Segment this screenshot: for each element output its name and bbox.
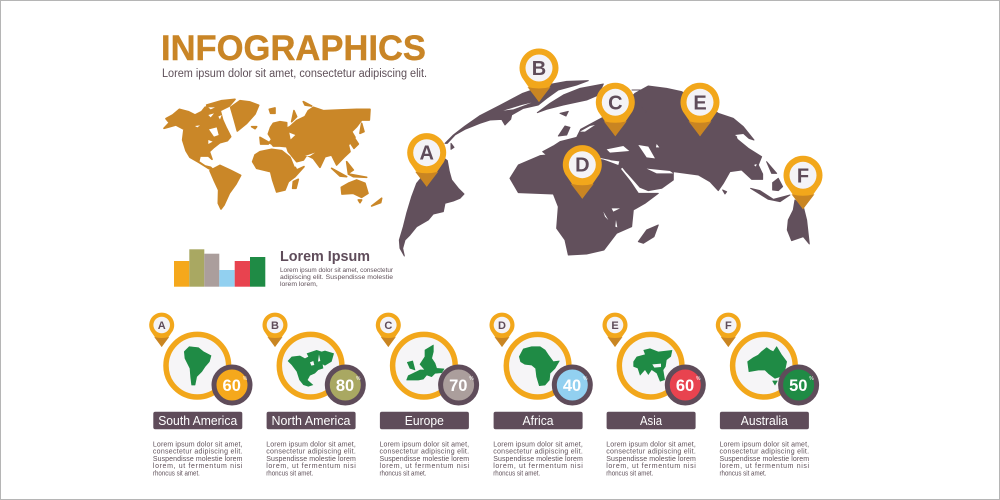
flat world map — [164, 99, 382, 209]
card: North America — [262, 313, 363, 477]
small pin C — [376, 313, 401, 347]
badge 80 — [327, 367, 363, 403]
badge 70 — [441, 367, 477, 403]
Australia — [787, 200, 809, 244]
description: Lorem ipsum dolor sit amet, — [153, 442, 243, 448]
pin B: B — [532, 58, 546, 80]
pin A: A — [419, 143, 434, 165]
card: Australia — [716, 313, 817, 477]
small pin E — [602, 313, 628, 347]
badge 80: % — [356, 376, 361, 382]
description: Lorem ipsum dolor sit amet, — [266, 442, 356, 448]
description: Suspendisse molestie lorem — [719, 456, 809, 463]
label: South America — [158, 413, 238, 428]
description: rhoncus sit amet. — [719, 470, 767, 477]
pin A — [407, 133, 446, 187]
card: Africa — [490, 313, 590, 477]
description: consectetur adipiscing elit. — [606, 449, 696, 456]
small pin D: D — [498, 320, 506, 332]
white cut-outs — [503, 103, 757, 227]
ring — [166, 334, 229, 397]
description — [380, 442, 470, 477]
map: Europe — [407, 345, 444, 380]
small pin B: B — [271, 320, 279, 332]
description: lorem, ut fermentum nisi — [266, 463, 356, 470]
description: lorem, ut fermentum nisi — [153, 463, 243, 470]
description: Suspendisse molestie lorem — [606, 456, 696, 463]
description — [153, 442, 243, 477]
badge 40: % — [583, 376, 588, 382]
description: Suspendisse molestie lorem — [493, 456, 583, 463]
ring — [733, 334, 795, 397]
description — [720, 442, 810, 477]
chart description: Lorem ipsum dolor sit amet, consectetur — [280, 267, 394, 274]
description: lorem, ut fermentum nisi — [493, 463, 583, 470]
curved world map — [399, 81, 809, 256]
ring — [506, 334, 569, 397]
ring — [279, 334, 342, 397]
chart heading: Lorem Ipsum — [280, 249, 370, 265]
card: South America — [149, 313, 250, 477]
bar chart — [174, 249, 265, 287]
badge 80: 80 — [336, 377, 354, 395]
label: Europe — [405, 413, 444, 428]
description: consectetur adipiscing elit. — [379, 449, 469, 456]
label: North America — [272, 413, 351, 428]
description: rhoncus sit amet. — [493, 470, 540, 477]
label: Asia — [640, 413, 663, 428]
description: Lorem ipsum dolor sit amet, — [379, 442, 469, 448]
South America — [399, 155, 464, 256]
description: Lorem ipsum dolor sit amet, — [606, 442, 696, 448]
chart description — [280, 267, 394, 288]
pin B — [520, 48, 558, 102]
small pin D — [490, 313, 514, 347]
description — [606, 442, 696, 477]
ring — [393, 334, 455, 397]
small pin B — [262, 313, 288, 347]
small pin A — [149, 313, 174, 347]
description: Suspendisse molestie lorem — [153, 456, 243, 463]
description: lorem, ut fermentum nisi — [379, 463, 470, 470]
Africa — [510, 153, 658, 255]
description: consectetur adipiscing elit. — [719, 449, 809, 456]
description: Suspendisse molestie lorem — [379, 456, 469, 463]
badge 60: % — [696, 376, 701, 382]
chart description: adipiscing elit. Suspendisse molestie — [280, 274, 393, 281]
badge 50: % — [809, 376, 814, 382]
description — [493, 442, 583, 477]
map: South America — [184, 347, 211, 385]
small pin C: C — [384, 320, 392, 332]
description: consectetur adipiscing elit. — [266, 449, 356, 456]
description — [266, 442, 356, 477]
small pin E: E — [611, 320, 619, 332]
badge 40: 40 — [563, 377, 581, 395]
card: Asia — [602, 313, 703, 477]
small pin F — [716, 313, 741, 347]
badge 70: 70 — [449, 377, 467, 395]
badge 60: 60 — [676, 377, 694, 395]
pin D — [563, 145, 602, 199]
badge 40 — [554, 367, 590, 403]
description: Lorem ipsum dolor sit amet, — [719, 442, 809, 448]
pin F: F — [797, 165, 809, 187]
Southeast Asia islands — [723, 162, 790, 202]
badge 50: 50 — [789, 377, 807, 395]
label: Africa — [522, 413, 554, 428]
label: Australia — [741, 413, 789, 428]
card: Europe — [376, 313, 477, 477]
pin E — [680, 83, 720, 136]
map: Asia — [633, 348, 672, 382]
description: rhoncus sit amet. — [379, 470, 427, 477]
title: INFOGRAPHICS — [161, 29, 426, 68]
Greenland — [537, 84, 603, 113]
badge 50 — [781, 367, 817, 403]
pin F — [784, 156, 822, 209]
badge 70: % — [469, 376, 474, 382]
ring — [619, 334, 682, 397]
pin D: D — [575, 155, 590, 177]
map: North America — [288, 350, 334, 387]
label — [720, 412, 809, 429]
subtitle: Lorem ipsum dolor sit amet, consectetur adipiscing elit. — [162, 68, 427, 80]
description: rhoncus sit amet. — [606, 470, 653, 477]
badge 60 — [214, 367, 250, 403]
description: consectetur adipiscing elit. — [153, 449, 243, 456]
chart description: lorem lorem, — [280, 281, 318, 288]
small pin F: F — [725, 320, 732, 332]
description: rhoncus sit amet. — [153, 470, 200, 477]
description: lorem, ut fermentum nisi — [719, 463, 810, 470]
badge 60: % — [243, 376, 248, 382]
description: Lorem ipsum dolor sit amet, — [493, 442, 583, 448]
description: rhoncus sit amet. — [266, 470, 313, 477]
badge 60: 60 — [223, 377, 241, 395]
Madagascar — [638, 225, 658, 243]
label — [607, 412, 696, 429]
pin C: C — [608, 92, 623, 114]
North America arc — [445, 81, 588, 143]
description: lorem, ut fermentum nisi — [606, 463, 696, 470]
label — [494, 412, 583, 429]
map: Australia — [748, 347, 787, 385]
pin C — [596, 83, 635, 136]
map: Africa — [519, 347, 559, 386]
Eurasia — [543, 86, 763, 191]
description: Suspendisse molestie lorem — [266, 456, 356, 463]
label — [380, 412, 469, 429]
pin E: E — [693, 92, 707, 114]
description: consectetur adipiscing elit. — [493, 449, 583, 456]
small pin A: A — [158, 320, 166, 332]
badge 60 — [667, 367, 703, 403]
